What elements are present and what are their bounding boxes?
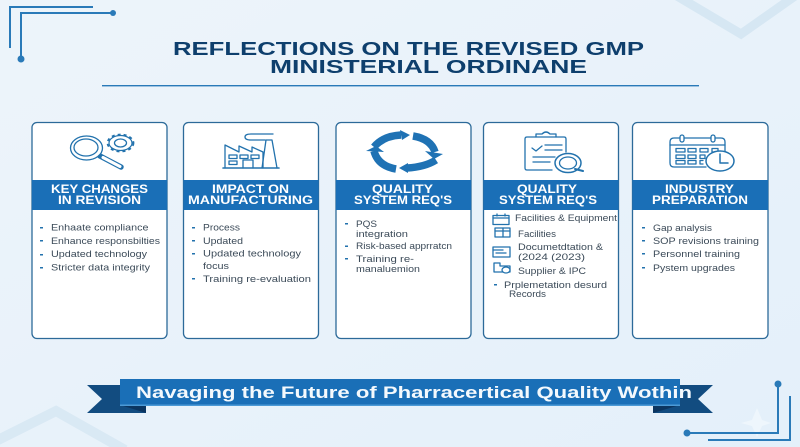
bullet list: Updated technology: [203, 248, 301, 260]
heading band: IN REVISION: [58, 195, 141, 207]
heading band: [484, 180, 618, 210]
bullet list: Updated: [203, 236, 243, 247]
icon: magnifier and gear: [70, 134, 134, 167]
bullet list: [642, 223, 759, 274]
list with icons: Supplier & IPC: [518, 266, 586, 277]
panel: key changes in revision: [32, 122, 167, 338]
heading band: SYSTEM REQ'S: [354, 195, 452, 207]
heading band: KEY CHANGES: [51, 184, 148, 196]
icon: cycle arrows: [366, 130, 443, 173]
panel: quality system requirements (cycle): [336, 122, 471, 338]
decoration: top-left corner lines: [10, 7, 116, 62]
icon: clipboard with magnifier: [525, 132, 583, 172]
heading band: [184, 180, 318, 210]
bullet list: Training re-: [356, 254, 414, 265]
ribbon banner: [87, 379, 713, 413]
heading band: QUALITY: [372, 184, 433, 196]
bullet list: Process: [203, 222, 240, 234]
heading band: PREPARATION: [652, 195, 748, 207]
bullet list: [40, 222, 160, 274]
list with icons: Documetdtation &: [518, 242, 604, 253]
list with icons: Records: [509, 289, 546, 300]
title: REFLECTIONS ON THE REVISED GMP: [173, 38, 644, 59]
bullet list: Risk-based apprratcn: [356, 241, 452, 252]
panel: industry preparation: [632, 122, 768, 338]
title: MINISTERIAL ORDINANE: [270, 56, 587, 77]
bullet list: [345, 219, 452, 275]
panel: quality system requirements (documents): [484, 122, 618, 338]
ribbon banner: Navaging the Future of Pharracertical Quality Wothin: [136, 383, 692, 402]
panel: impact on manufacturing: [184, 122, 318, 338]
heading band: INDUSTRY: [665, 184, 734, 196]
icon: factory: [223, 134, 279, 168]
icon: calendar and clock: [670, 135, 734, 171]
list with icons: Prplemetation desurd: [504, 280, 607, 291]
list with icons: Facilities: [518, 229, 556, 240]
list with icons: (2024 (2023): [518, 252, 585, 263]
heading band: [32, 180, 167, 210]
heading band: SYSTEM REQ'S: [499, 195, 597, 207]
bullet list: manaluemion: [356, 264, 420, 275]
bullet list: Pystem upgrades: [653, 263, 735, 274]
bullet list: integration: [356, 229, 408, 240]
heading band: [632, 180, 768, 210]
bullet list: Gap analysis: [653, 223, 712, 234]
title: [173, 38, 644, 77]
decoration: bottom-right corner lines: [684, 380, 790, 440]
bullet list: Enhaate compliance: [51, 222, 148, 234]
heading band: IMPACT ON: [212, 184, 289, 196]
heading band: [336, 180, 471, 210]
bullet list: [192, 222, 311, 285]
bullet list: Personnel training: [653, 249, 740, 260]
bullet list: Enhance responsbilties: [51, 236, 160, 247]
bullet list: PQS: [356, 219, 377, 230]
list with icons: [493, 213, 617, 300]
bullet list: Stricter data integrity: [51, 262, 150, 274]
heading band: MANUFACTURING: [188, 195, 313, 207]
heading band: QUALITY: [517, 184, 577, 196]
bullet list: focus: [203, 261, 229, 272]
bullet list: SOP revisions training: [653, 236, 759, 247]
bullet list: Training re-evaluation: [203, 274, 311, 285]
list with icons: Facilities & Equipment: [515, 213, 617, 224]
bullet list: Updated technology: [51, 249, 147, 260]
